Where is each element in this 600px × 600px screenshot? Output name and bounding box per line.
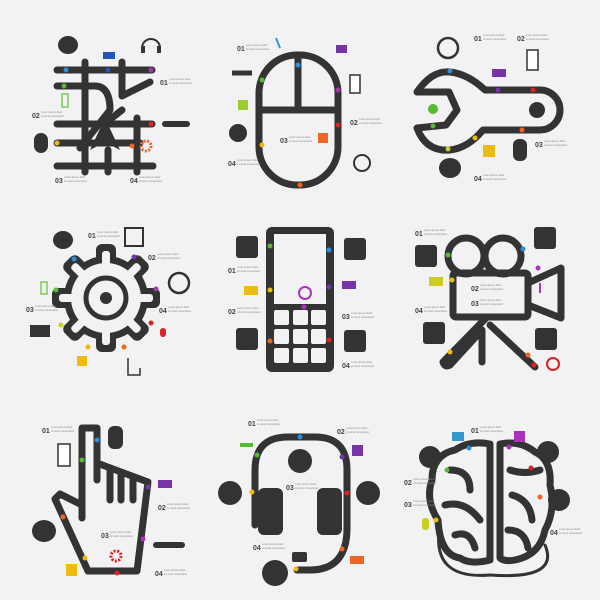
panel: mouse: Lorem ipsum dolor: [237, 158, 259, 162]
panel: brain: sit amet consectetur: [480, 429, 503, 433]
panel: map: sit amet consectetur: [139, 179, 162, 183]
panel: wrench: Lorem ipsum dolor: [483, 33, 505, 37]
panel: headphones: Lorem ipsum dolor: [346, 426, 368, 430]
icon: gear: [141, 141, 151, 151]
panel: brain: Lorem ipsum dolor: [413, 477, 435, 481]
panel: mouse: sit amet consectetur: [289, 139, 312, 143]
panel: map: Lorem ipsum dolor: [139, 175, 161, 179]
panel: hand pointer: sit amet consectetur: [164, 572, 187, 576]
panel: hand pointer: 01: [42, 428, 50, 435]
panel: brain: 01: [471, 428, 479, 435]
panel: video camera: sit amet consectetur: [480, 287, 503, 291]
icon: phone: [62, 94, 68, 107]
panel: brain: [404, 425, 582, 576]
camera outline: [443, 238, 561, 367]
panel: video camera: Lorem ipsum dolor: [424, 228, 446, 232]
panel: mouse: Lorem ipsum dolor: [359, 117, 381, 121]
panel: phone: Lorem ipsum dolor: [237, 265, 259, 269]
panel: video camera: sit amet consectetur: [480, 302, 503, 306]
map roads: [57, 62, 153, 172]
panel: hand pointer: sit amet consectetur: [51, 429, 74, 433]
panel: wrench: sit amet consectetur: [544, 143, 567, 147]
panel: headphones: sit amet consectetur: [262, 546, 285, 550]
panel: map: Lorem ipsum dolor: [64, 175, 86, 179]
panel: hand pointer: Lorem ipsum dolor: [51, 425, 73, 429]
icons around headphones: [218, 445, 380, 586]
panel: hand pointer: 03: [101, 533, 109, 540]
panel: headphones: sit amet consectetur: [295, 486, 318, 490]
headphones outline: [255, 437, 347, 570]
panel: wrench: sit amet consectetur: [526, 37, 549, 41]
panel: gear: 04: [159, 308, 167, 315]
icon: camera: [103, 52, 115, 59]
panel: brain: Lorem ipsum dolor: [413, 499, 435, 503]
panel: mouse: Lorem ipsum dolor: [246, 43, 268, 47]
gear outline: [52, 244, 160, 352]
icon: mouse: [34, 133, 48, 153]
panel: hand pointer: 04: [155, 571, 163, 578]
icons around mouse: [229, 38, 370, 171]
panel: mouse: 03: [280, 138, 288, 145]
panel: phone: Lorem ipsum dolor: [351, 360, 373, 364]
icon: navigation arrow: [90, 118, 120, 150]
panel: hand pointer: Lorem ipsum dolor: [167, 502, 189, 506]
panel: headphones: [218, 418, 380, 586]
icons around camera: [415, 227, 559, 370]
panel: brain: sit amet consectetur: [413, 481, 436, 485]
panel: video camera: Lorem ipsum dolor: [424, 305, 446, 309]
panel: headphones: sit amet consectetur: [257, 422, 280, 426]
phone body: [266, 227, 334, 372]
panel: wrench: sit amet consectetur: [483, 37, 506, 41]
icons around brain: [419, 431, 570, 530]
panel: gear: 01: [88, 233, 96, 240]
panel: brain: sit amet consectetur: [413, 503, 436, 507]
panel: mouse: sit amet consectetur: [359, 121, 382, 125]
panel: phone: 04: [342, 363, 350, 370]
panel: phone: sit amet consectetur: [237, 310, 260, 314]
panel: hand pointer: sit amet consectetur: [167, 506, 190, 510]
panel: gear: sit amet consectetur: [35, 308, 58, 312]
panel: video camera: 04: [415, 308, 423, 315]
panel: map: 04: [130, 178, 138, 185]
panel: gear: sit amet consectetur: [97, 234, 120, 238]
panel: gear: Lorem ipsum dolor: [97, 230, 119, 234]
panel: map: 03: [55, 178, 63, 185]
panel: wrench: Lorem ipsum dolor: [526, 33, 548, 37]
panel: wrench: 02: [517, 36, 525, 43]
panel: map: 01: [160, 80, 168, 87]
icons around gear: [30, 228, 189, 375]
panel: phone: Lorem ipsum dolor: [237, 306, 259, 310]
panel: map: sit amet consectetur: [41, 114, 64, 118]
panel: gear: [26, 228, 191, 375]
panel: hand pointer: 02: [158, 505, 166, 512]
panel: mouse: [228, 38, 382, 188]
wrench outline: [417, 72, 560, 150]
mouse outline: [259, 55, 338, 185]
panel: wrench: 03: [535, 142, 543, 149]
panel: map: [32, 36, 192, 185]
panel: video camera: Lorem ipsum dolor: [480, 283, 502, 287]
panel: headphones: 04: [253, 545, 261, 552]
panel: wrench: Lorem ipsum dolor: [483, 173, 505, 177]
panel: mouse: Lorem ipsum dolor: [289, 135, 311, 139]
panel: mouse: 02: [350, 120, 358, 127]
panel: gear: sit amet consectetur: [157, 256, 180, 260]
panel: gear: Lorem ipsum dolor: [157, 252, 179, 256]
panel: brain: Lorem ipsum dolor: [559, 527, 581, 531]
panel: phone: 01: [228, 268, 236, 275]
panel: mouse: 04: [228, 161, 236, 168]
brain outline: [430, 443, 552, 576]
panel: brain: 03: [404, 502, 412, 509]
panel: gear: 03: [26, 307, 34, 314]
panel: headphones: Lorem ipsum dolor: [295, 482, 317, 486]
panel: gear: sit amet consectetur: [168, 309, 191, 313]
panel: wrench: 04: [474, 176, 482, 183]
panel: video camera: 03: [471, 301, 479, 308]
panel: hand pointer: Lorem ipsum dolor: [110, 530, 132, 534]
panel: hand pointer: [32, 425, 190, 578]
panel: brain: 04: [550, 530, 558, 537]
icons around wrench: [428, 38, 538, 178]
panel: video camera: sit amet consectetur: [424, 232, 447, 236]
panel: headphones: Lorem ipsum dolor: [262, 542, 284, 546]
panel: wrench: 01: [474, 36, 482, 43]
panel: gear: 02: [148, 255, 156, 262]
panel: phone: [228, 227, 374, 372]
panel: headphones: sit amet consectetur: [346, 430, 369, 434]
panel: headphones: 01: [248, 421, 256, 428]
panel: map: sit amet consectetur: [169, 81, 192, 85]
panel: wrench: Lorem ipsum dolor: [544, 139, 566, 143]
panel: phone: sit amet consectetur: [351, 364, 374, 368]
panel: mouse: 01: [237, 46, 245, 53]
panel: video camera: 02: [471, 286, 479, 293]
panel: phone: 03: [342, 314, 350, 321]
panel: headphones: 03: [286, 485, 294, 492]
panel: headphones: 02: [337, 429, 345, 436]
panel: phone: sit amet consectetur: [351, 315, 374, 319]
panel: headphones: Lorem ipsum dolor: [257, 418, 279, 422]
icons around hand: [32, 426, 182, 576]
hand outline: [55, 428, 148, 571]
icon: brain: [58, 36, 78, 54]
panel: mouse: sit amet consectetur: [246, 47, 269, 51]
panel: mouse: sit amet consectetur: [237, 162, 260, 166]
panel: video camera: Lorem ipsum dolor: [480, 298, 502, 302]
panel: video camera: [415, 227, 561, 370]
panel: hand pointer: sit amet consectetur: [110, 534, 133, 538]
panel: map: Lorem ipsum dolor: [169, 77, 191, 81]
panel: gear: Lorem ipsum dolor: [168, 305, 190, 309]
panel: phone: 02: [228, 309, 236, 316]
panel: gear: Lorem ipsum dolor: [35, 304, 57, 308]
panel: brain: sit amet consectetur: [559, 531, 582, 535]
icon: wrench: [165, 121, 187, 127]
icon: headset: [142, 39, 160, 48]
icons around phone: [236, 236, 366, 352]
panel: hand pointer: Lorem ipsum dolor: [164, 568, 186, 572]
panel: brain: Lorem ipsum dolor: [480, 425, 502, 429]
panel: map: Lorem ipsum dolor: [41, 110, 63, 114]
panel: video camera: 01: [415, 231, 423, 238]
panel: map: 02: [32, 113, 40, 120]
panel: brain: 02: [404, 480, 412, 487]
panel: wrench: [417, 33, 567, 183]
panel: phone: Lorem ipsum dolor: [351, 311, 373, 315]
panel: wrench: sit amet consectetur: [483, 177, 506, 181]
panel: map: sit amet consectetur: [64, 179, 87, 183]
panel: phone: sit amet consectetur: [237, 269, 260, 273]
panel: video camera: sit amet consectetur: [424, 309, 447, 313]
